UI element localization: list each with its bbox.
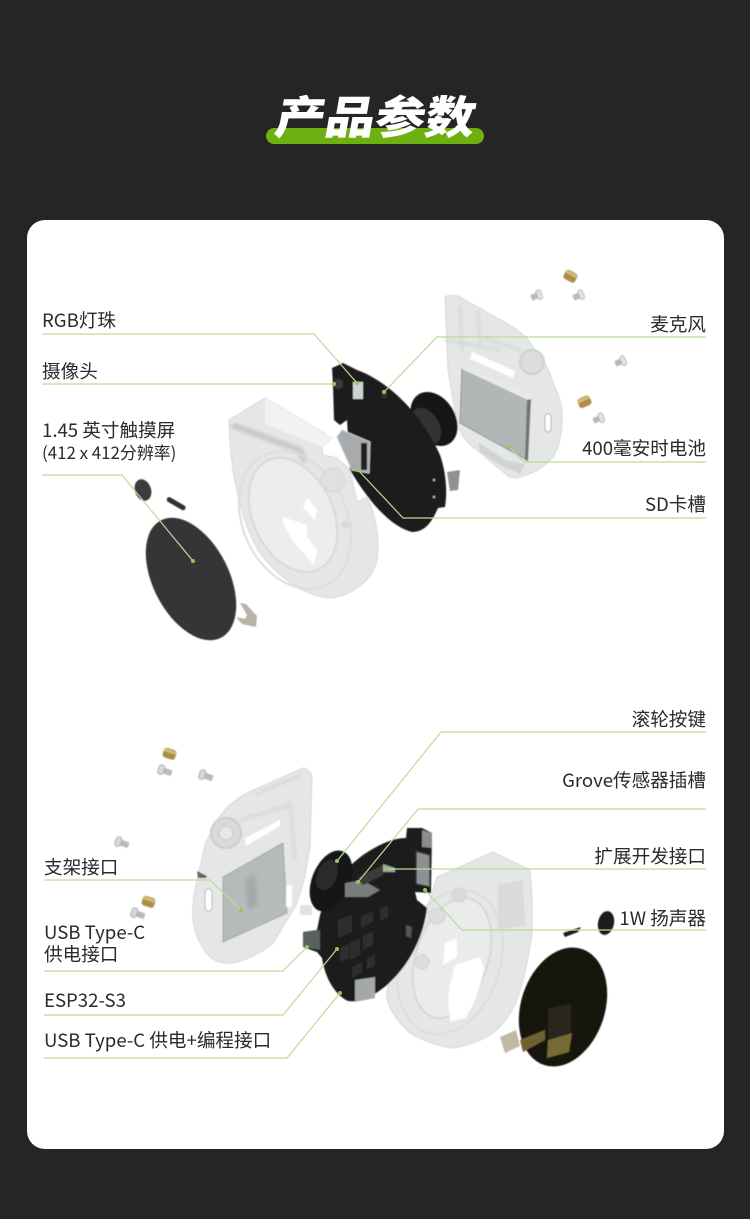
screw xyxy=(613,355,627,369)
screw in case xyxy=(197,871,207,878)
screw xyxy=(114,836,130,850)
screw xyxy=(198,769,214,783)
SD card slot xyxy=(337,430,370,473)
top grey block xyxy=(422,830,432,848)
screw xyxy=(591,412,605,426)
speaker in board xyxy=(416,851,430,887)
label: 1.45 英寸触摸屏: (412 x 412分辨率) xyxy=(42,439,176,464)
icon: screws and brass standoffs xyxy=(529,269,627,426)
icon: display back disc xyxy=(500,910,622,1078)
case window cut-outs xyxy=(443,938,457,965)
icon: transparent front case xyxy=(380,852,532,1048)
icon: black circuit board with wheel xyxy=(301,828,432,1002)
label: Grove传感器插槽: Grove传感器插槽 xyxy=(562,766,706,793)
icon: wheel at rear of board xyxy=(401,383,467,491)
label: 麦克风: 麦克风 xyxy=(650,310,706,337)
USB connector xyxy=(355,977,375,1002)
icon: black circuit board xyxy=(332,363,446,532)
label: USB Type-C 供电接口 xyxy=(44,918,145,967)
RGB LED xyxy=(353,382,363,399)
label: 1W 扬声器: 1W 扬声器 xyxy=(619,904,706,931)
label: RGB灯珠: RGB灯珠 xyxy=(42,306,116,333)
icon: transparent front case xyxy=(217,398,378,607)
leader lines: bottom view xyxy=(44,732,706,1058)
label: 1.45 英寸触摸屏: 1.45 英寸触摸屏 xyxy=(42,416,175,443)
icon: screws and brass standoffs xyxy=(114,747,214,921)
label: 扩展开发接口: 扩展开发接口 xyxy=(594,842,706,869)
brass standoff xyxy=(562,269,579,284)
brass standoff xyxy=(141,895,156,909)
label: 1.45 英寸触摸屏 xyxy=(42,416,176,464)
Grove connector xyxy=(345,880,380,897)
label: 摄像头: 摄像头 xyxy=(42,357,98,384)
title text: 产品参数 xyxy=(271,81,482,147)
icon: rear transparent case with battery xyxy=(445,295,562,478)
top exploded view xyxy=(127,269,627,655)
label: USB Type-C 供电接口: 供电接口 xyxy=(44,940,118,967)
screw xyxy=(529,289,543,303)
label: 400毫安时电池: 400毫安时电池 xyxy=(582,434,706,461)
screw xyxy=(130,907,146,921)
battery xyxy=(460,367,530,460)
label: 支架接口: 支架接口 xyxy=(44,853,118,880)
icon: rear transparent case with battery xyxy=(193,768,312,963)
label: USB Type-C 供电接口: USB Type-C xyxy=(44,918,145,945)
title: 产品参数 xyxy=(266,81,484,147)
brass standoff xyxy=(576,395,592,409)
screw xyxy=(157,764,173,778)
leader lines: top view xyxy=(42,334,706,563)
label: 滚轮按键: 滚轮按键 xyxy=(632,705,706,732)
label: USB Type-C 供电+编程接口: USB Type-C 供电+编程接口 xyxy=(44,1026,271,1053)
panel: white card xyxy=(27,220,724,1149)
screw xyxy=(571,289,585,303)
brass standoff xyxy=(162,747,177,761)
label: SD卡槽: SD卡槽 xyxy=(645,490,706,517)
label: ESP32-S3: ESP32-S3 xyxy=(44,986,126,1013)
scroll wheel xyxy=(301,844,361,918)
title underline bar xyxy=(266,128,484,144)
chips xyxy=(338,905,388,978)
case window cut-outs xyxy=(303,498,317,520)
bottom exploded view xyxy=(114,747,622,1078)
icon: touch screen disc xyxy=(127,477,257,655)
